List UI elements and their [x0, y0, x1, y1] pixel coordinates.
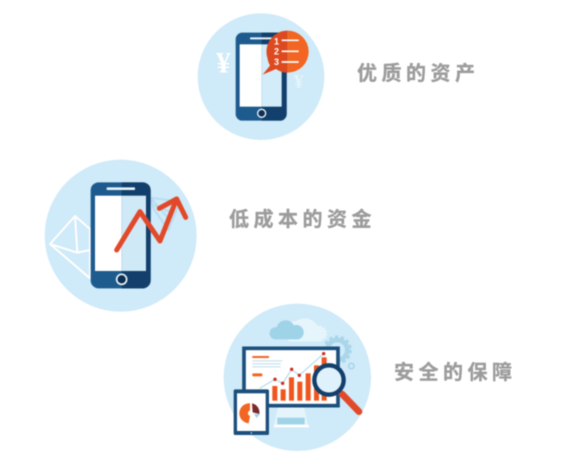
faint paper plane [151, 198, 180, 230]
speech bubble with list: 2 [274, 46, 279, 56]
gears [313, 326, 354, 369]
speech bubble with list: 1 [274, 36, 279, 46]
bar chart [272, 357, 327, 401]
heading: 优质的资产: 优质的资产 [357, 62, 480, 85]
envelope [50, 216, 90, 278]
blue cloud [270, 320, 304, 339]
phone body [91, 182, 151, 288]
icon: phone with rising arrow [45, 160, 197, 312]
background circle [198, 13, 324, 140]
heading: 低成本的资金: 低成本的资金 [229, 207, 376, 231]
phone body [236, 33, 287, 121]
icon: phone with ranked list bubble [198, 13, 324, 140]
speech bubble with list [263, 31, 309, 75]
white cloud [285, 318, 323, 342]
magnifying glass [314, 365, 359, 412]
trend line [260, 352, 325, 388]
monitor [244, 348, 338, 406]
chart text lines [252, 356, 282, 376]
yen symbol left: ¥ [216, 48, 231, 80]
heading: 安全的保障: 安全的保障 [394, 360, 516, 384]
background circle [45, 160, 197, 312]
rising arrow [117, 199, 186, 250]
yen symbol right: ¥ [294, 72, 304, 93]
background circle [224, 304, 371, 451]
monitor stand [274, 407, 309, 427]
tablet with pie chart [234, 389, 269, 435]
speech bubble with list: 3 [274, 57, 279, 67]
icon: analytics dashboard [224, 304, 371, 451]
